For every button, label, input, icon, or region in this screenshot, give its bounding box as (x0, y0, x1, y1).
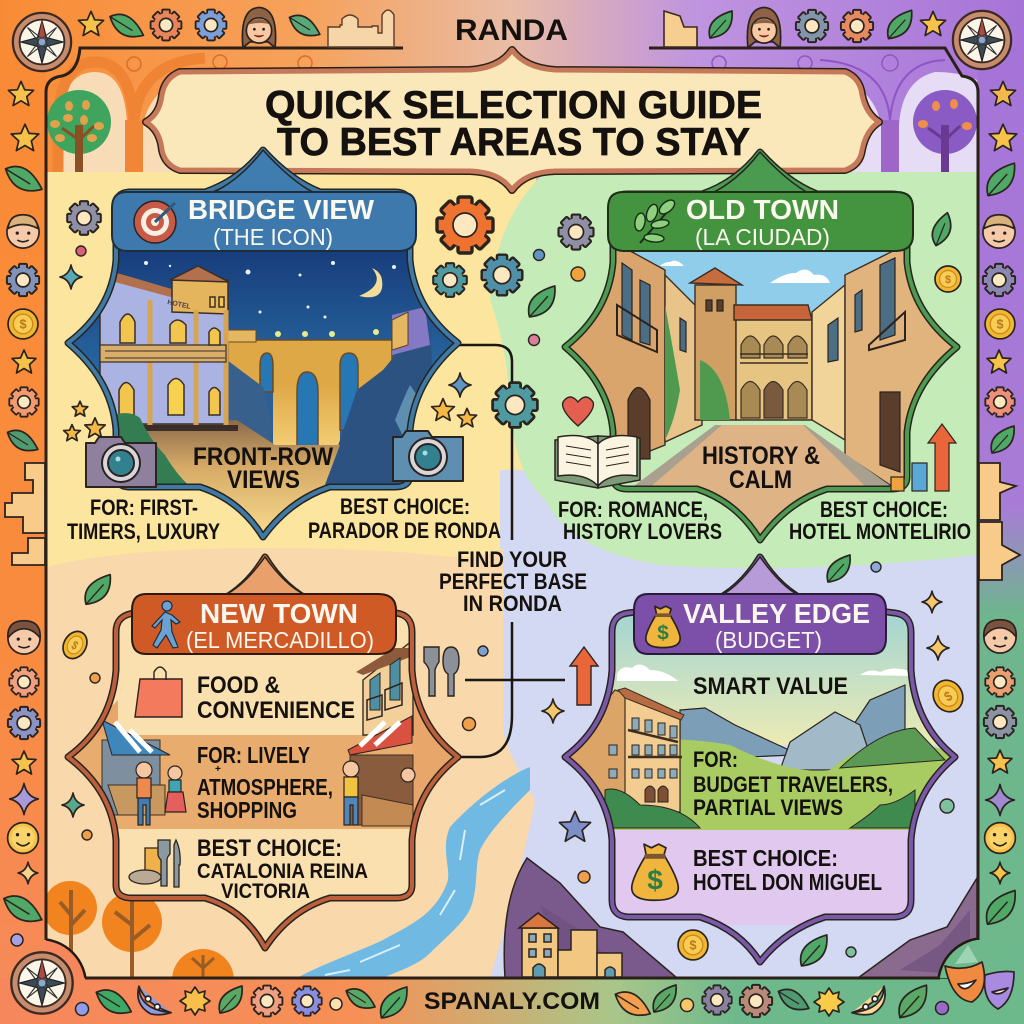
icon: burst (814, 988, 844, 1016)
icon: coin (8, 309, 38, 339)
frame: bridge view (68, 150, 458, 537)
hills (605, 789, 915, 828)
building (363, 640, 413, 735)
icon: leaf (4, 892, 42, 926)
icon: compass top left (13, 13, 71, 71)
icon: leaf (381, 987, 407, 1018)
icon: leaf (110, 11, 143, 41)
title text: QUICK SELECTION GUIDE (265, 84, 762, 127)
icon: castle wall (979, 463, 1020, 580)
icon: rising bars and arrow (891, 424, 956, 491)
icon: leaf (529, 286, 555, 317)
tip: old town (708, 152, 812, 195)
scene: old town street (570, 250, 952, 534)
icon: star (12, 350, 36, 373)
header: new town (132, 594, 396, 654)
icon: leaf (987, 890, 1015, 924)
dots (82, 562, 954, 957)
icon: teal gear 2 (482, 255, 522, 295)
text: front-row views: VIEWS (227, 466, 300, 494)
plaza (634, 425, 890, 486)
icon: sparkle 2 (449, 373, 471, 397)
icon: gray gear (558, 214, 594, 250)
left arches (58, 55, 312, 172)
icon: coin (985, 309, 1015, 339)
icon: sparkle (60, 265, 82, 289)
connector lines (456, 345, 565, 757)
text: history and calm: CALM (729, 466, 792, 494)
icon: tower (664, 11, 697, 47)
hotel (100, 268, 226, 424)
text: smart value: SMART VALUE (693, 673, 848, 700)
icon: leaf (709, 11, 732, 38)
dot (330, 998, 342, 1010)
text: best choice (197, 835, 368, 903)
header: valley: VALLEY EDGE (683, 598, 870, 629)
icon: gear (983, 264, 1015, 296)
icon: compass bottom left (11, 952, 73, 1014)
text: best choice: HOTEL MONTELIRIO (789, 519, 971, 544)
icon: compass top right (953, 11, 1011, 69)
title plate (146, 50, 879, 190)
border: top row (78, 7, 946, 48)
icon: face (747, 7, 781, 48)
text: for (693, 747, 893, 820)
icon: gear (292, 986, 322, 1016)
icon: leaf (653, 985, 676, 1012)
icon: sparkle (10, 783, 38, 815)
dots (528, 250, 585, 346)
heading: Randa: RANDA (455, 14, 568, 47)
header: new town: (EL MERCADILLO) (186, 627, 374, 653)
text: for: ATMOSPHERE, (197, 774, 333, 800)
icon: moon (138, 986, 171, 1015)
tree: purple (913, 90, 977, 172)
icon: fork and spoon (424, 647, 459, 696)
bushes (117, 413, 187, 484)
vines (665, 305, 730, 440)
scene: market (74, 642, 452, 894)
icon: heart (563, 397, 593, 426)
icon: orange gear (841, 10, 873, 42)
icon: castle (328, 10, 394, 47)
panel: bridge view (60, 150, 501, 544)
people (136, 761, 415, 825)
heading: website: SPANALY.COM (424, 988, 600, 1015)
header: bridge view: (THE ICON) (213, 224, 333, 250)
dot (936, 1002, 948, 1014)
icon: sparkle (18, 862, 38, 884)
icon: leaf (778, 986, 809, 1013)
icon: leaf (7, 427, 38, 454)
icon: moon (852, 986, 885, 1015)
panel: new town (60, 550, 470, 950)
tip: bridge view (212, 150, 314, 193)
border: left column (4, 81, 45, 946)
header: old town: OLD TOWN (686, 194, 839, 225)
icon: leaf bottom (801, 935, 827, 966)
dot (76, 1002, 88, 1016)
stall left (102, 720, 170, 815)
decorative icons: lower quadrants (58, 555, 969, 966)
orange trees (48, 881, 234, 976)
text: for: TIMERS, LUXURY (67, 519, 220, 544)
text: front-row views (193, 443, 333, 494)
icon: face (242, 7, 276, 48)
icon: star (920, 11, 946, 36)
text: best choice (693, 845, 882, 895)
hotel (570, 689, 681, 812)
text: best choice: BEST CHOICE: (340, 494, 470, 519)
icon: star (989, 124, 1017, 151)
scene: night bridge (73, 250, 453, 531)
icon: gear (702, 985, 732, 1015)
text: for: FOR: FIRST- (90, 495, 198, 520)
icon: leaf (987, 163, 1015, 196)
icon: gear (9, 387, 39, 417)
icon: star cluster right (432, 399, 477, 427)
town (519, 913, 622, 978)
text: for: FOR: (693, 747, 738, 772)
icon: gear (984, 706, 1016, 738)
icon: leaf (991, 426, 1014, 453)
icon: money bag (646, 606, 680, 648)
header: valley (634, 594, 886, 654)
text: history and calm: HISTORY & (702, 442, 820, 470)
icon: star (12, 751, 36, 774)
text: best choice (308, 494, 501, 543)
title text (265, 84, 762, 164)
text: for (197, 742, 333, 823)
icon: leaf (289, 12, 320, 39)
icon: gray gear (796, 10, 828, 42)
icon: teal gear (433, 263, 467, 297)
icon: purple camera (86, 437, 156, 487)
icon: castle wall (5, 463, 45, 565)
icon: gear (7, 264, 39, 296)
header: bridge view: BRIDGE VIEW (188, 194, 375, 225)
text: for: FOR: LIVELY (197, 742, 310, 768)
river (297, 767, 530, 978)
icon: gear (8, 707, 40, 739)
text: best choice: CATALONIA REINA (197, 860, 368, 883)
header: new town: NEW TOWN (200, 598, 358, 629)
frame: new town (68, 557, 458, 948)
text: best choice: PARADOR DE RONDA (308, 518, 501, 543)
ground (143, 420, 340, 531)
header: old town: (LA CIUDAD) (695, 224, 830, 250)
icon: tilted coin (927, 675, 969, 717)
dot (76, 246, 86, 256)
text: history and calm (702, 442, 820, 494)
icon: walker (152, 601, 180, 648)
text: best choice: VICTORIA (221, 880, 310, 903)
text: best choice: HOTEL DON MIGUEL (693, 869, 882, 895)
icon: sparkle (986, 784, 1014, 816)
icon: leaf (899, 985, 927, 1018)
border: right column (979, 81, 1020, 924)
icon: sparkle top right (922, 591, 942, 613)
icon: target (134, 201, 176, 243)
frame: valley (565, 557, 955, 962)
text: for: HISTORY LOVERS (563, 519, 722, 544)
icon: leaf (5, 162, 42, 195)
mountains and town (504, 858, 977, 978)
icon: gray gear (67, 201, 101, 235)
icon: coin (58, 627, 92, 663)
icon: face (7, 215, 39, 248)
text: best choice (789, 497, 971, 544)
dot (680, 998, 694, 1012)
text: find your perfect base: IN RONDA (463, 591, 562, 616)
icon: leaf right (926, 213, 957, 246)
bridge (228, 340, 392, 390)
icon: big money bag (632, 844, 678, 900)
icon: orange gear (437, 197, 493, 253)
stall right (348, 716, 413, 826)
icon: leaf (888, 10, 912, 39)
icon: gear (985, 387, 1015, 417)
icon: burst (180, 987, 210, 1015)
text: for (67, 495, 220, 544)
icon: gear (252, 986, 282, 1016)
icon: open book (555, 436, 640, 488)
text: find your perfect base (439, 547, 587, 616)
icon: leaf (219, 986, 242, 1013)
icon: face (8, 621, 40, 654)
panel: valley edge (560, 555, 960, 962)
tip: valley (722, 557, 798, 595)
icon: star (78, 11, 104, 36)
text: for (558, 497, 722, 544)
frame: old town (565, 152, 957, 540)
icon: sparkle right (927, 636, 949, 660)
icon: sparkle (62, 793, 84, 817)
icon: smile (8, 823, 38, 853)
icon: leaf top (827, 555, 850, 582)
tip: new town (225, 557, 305, 595)
icon: face (983, 215, 1015, 248)
icon: star cluster left (64, 401, 105, 441)
header: bridge view (112, 192, 416, 251)
icon: bottom coin (678, 930, 708, 960)
text: best choice: BEST CHOICE: (197, 835, 342, 862)
icon: leaf (346, 986, 375, 1012)
cliffs (228, 361, 272, 442)
text: for: PARTIAL VIEWS (693, 795, 843, 820)
text: for: + (215, 764, 221, 775)
icon: face (984, 620, 1016, 653)
icon: star (990, 81, 1016, 106)
decorative icons: top right quadrant (528, 213, 961, 346)
icon: gear (740, 985, 772, 1017)
inner map area (46, 172, 978, 978)
text: food and convenience: CONVENIENCE (197, 697, 355, 724)
icon: blue star (559, 811, 591, 841)
icon: gear (151, 10, 181, 40)
icon: star (8, 81, 34, 106)
icon: shopping bag (135, 667, 182, 717)
icon: olive branch (634, 197, 677, 243)
tree: green (47, 90, 111, 172)
panel: old town (555, 152, 971, 545)
icon: blue gear (196, 10, 226, 40)
icon: coin (935, 266, 961, 292)
icon: sparkle (990, 862, 1010, 884)
text: find your perfect base: FIND YOUR (457, 547, 567, 572)
moon (359, 268, 382, 297)
text: find your perfect base: PERFECT BASE (439, 569, 587, 594)
icon: theatre masks (945, 945, 1014, 1009)
text: for: BUDGET TRAVELERS, (693, 772, 893, 797)
icon: sparkle yellow (542, 699, 564, 723)
icon: star (988, 750, 1012, 773)
icon: blue camera (393, 431, 463, 481)
icon: star (11, 124, 39, 151)
icon: leaf (96, 986, 131, 1017)
text: food and convenience (197, 672, 355, 724)
header: old town (608, 192, 913, 251)
scene: night bridge: HOTEL (167, 299, 192, 311)
icon: teal gear 3 (493, 383, 537, 427)
icon: orange arrow (570, 647, 598, 705)
text: food and convenience: FOOD & (197, 672, 280, 699)
icon: leaf (85, 575, 110, 604)
dot (11, 934, 23, 946)
icon: orange leaf (615, 988, 650, 1019)
text: for: SHOPPING (197, 797, 297, 823)
icon: food and cutlery (129, 840, 180, 887)
header: valley: (BUDGET) (715, 627, 822, 653)
decorative icons: top left quadrant (60, 197, 537, 441)
icon: gear (985, 667, 1015, 697)
icon: smile (985, 823, 1015, 853)
icon: gear (9, 667, 39, 697)
icon: star (987, 350, 1011, 373)
right arches (712, 55, 977, 172)
corner bites (46, 938, 978, 978)
text: for: FOR: ROMANCE, (558, 497, 708, 522)
text: front-row views: FRONT-ROW (193, 443, 333, 471)
border: bottom row (76, 985, 948, 1019)
scene: valley (570, 616, 950, 925)
text: best choice: BEST CHOICE: (693, 845, 838, 871)
title text: TO BEST AREAS TO STAY (277, 121, 750, 164)
text: best choice: BEST CHOICE: (820, 497, 948, 522)
